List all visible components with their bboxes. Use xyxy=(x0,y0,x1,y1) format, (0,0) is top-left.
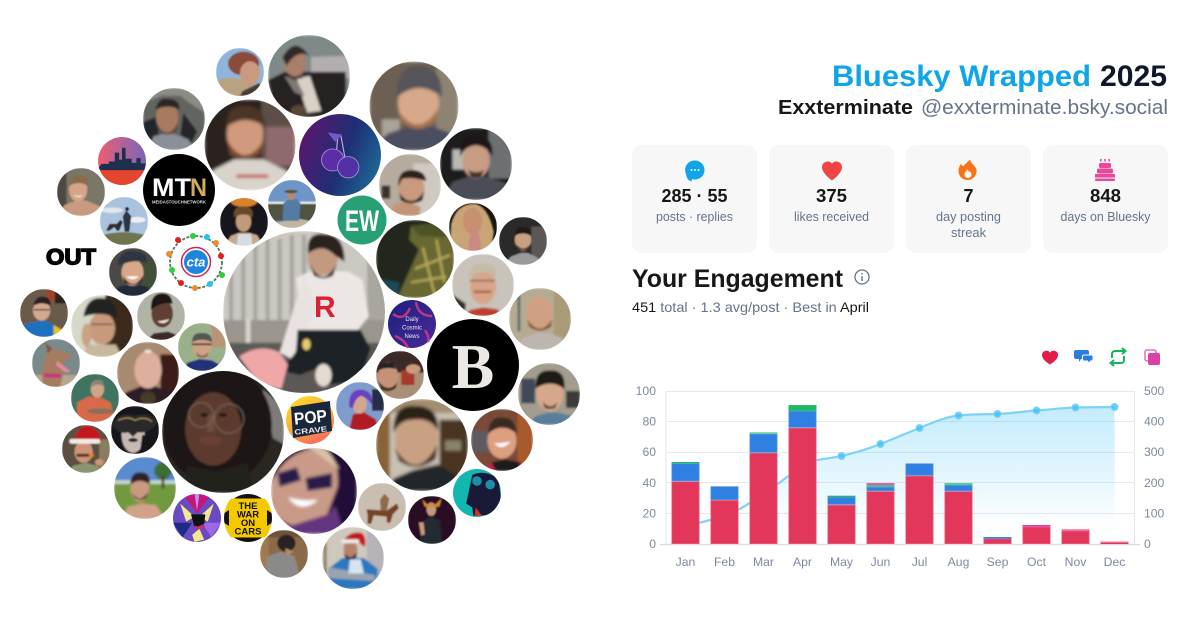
avatar: man with moustache and glasses xyxy=(452,254,514,316)
icon: legend heart xyxy=(1042,351,1058,364)
avatar cloud xyxy=(20,35,580,589)
avatar: man with glasses, purple toned xyxy=(271,448,357,534)
logo: MidasTouch Network xyxy=(143,154,215,226)
logo: The War on Cars: ON xyxy=(241,518,255,529)
avatar: man in landscape xyxy=(268,180,316,228)
avatar: glasses, blue jacket xyxy=(20,289,68,337)
month labels: Dec xyxy=(1104,555,1125,569)
logo: OUT: OUT xyxy=(46,244,97,270)
left axis labels: 100 xyxy=(636,384,656,398)
logo: Daily Cosmic News: News xyxy=(404,334,420,340)
stat card: day posting streak xyxy=(906,145,1031,253)
stat card: day posting streak: streak xyxy=(951,226,987,240)
month labels: May xyxy=(830,555,854,569)
logo: B: B xyxy=(452,331,494,402)
stat card: likes received: 375 xyxy=(816,186,847,206)
month labels: Sep xyxy=(987,555,1009,569)
icon: legend quotes xyxy=(1145,350,1160,365)
logo: The War on Cars: CARS xyxy=(235,526,261,538)
logo: Daily Cosmic News: Cosmic xyxy=(402,326,422,332)
avatar: vader with sunglasses xyxy=(453,469,501,517)
right axis labels: 0 xyxy=(1144,537,1151,551)
logo: Pop Crave xyxy=(286,396,334,444)
stat card: day posting streak: day posting xyxy=(936,210,1001,224)
avatar: man in black cap with hand on cheek xyxy=(71,295,133,357)
avatar: blonde praying xyxy=(449,203,497,251)
logo: MidasTouch Network: N xyxy=(190,174,207,202)
avatar: curly-haired man xyxy=(220,196,268,246)
avatar: man in selfie with red picture xyxy=(376,351,424,399)
avatar: man with beard in living room xyxy=(376,399,468,491)
logo: cta with string lights: cta xyxy=(187,254,205,270)
stat card: day posting streak: 7 xyxy=(963,186,974,206)
logo: Pop Crave: CRAVE xyxy=(294,424,328,437)
right axis labels: 500 xyxy=(1144,384,1165,398)
stat card: likes received: likes received xyxy=(794,210,869,224)
avatar: man with cat on couch xyxy=(268,35,350,117)
stat card: posts and replies: posts · replies xyxy=(656,210,733,224)
avatar: black and gold mask xyxy=(111,406,159,454)
right axis labels: 300 xyxy=(1144,445,1165,459)
avatar: man in rainbow tee xyxy=(499,217,547,265)
month labels: Feb xyxy=(714,555,735,569)
avatar: man in beanie xyxy=(370,62,458,150)
avatar: horse figurine xyxy=(358,483,406,531)
avatar: dog xyxy=(32,339,80,387)
month labels: Jun xyxy=(871,555,890,569)
avatar: tree and face xyxy=(216,48,264,96)
avatar: man in floral shirt xyxy=(71,374,119,422)
title: 2025 xyxy=(1100,60,1167,93)
logo: Daily Cosmic News xyxy=(388,300,436,348)
right axis labels: 400 xyxy=(1144,414,1165,428)
right axis labels: 200 xyxy=(1144,476,1165,490)
avatar: man in car xyxy=(143,88,205,150)
logo: EW xyxy=(338,196,386,244)
avatar: shirtless man on grass xyxy=(114,457,176,519)
user name and handle: Exxterminate xyxy=(778,97,913,119)
avatar: smiling man in cap xyxy=(109,248,157,296)
logo: EW: EW xyxy=(345,205,379,238)
avatar: man in santa hat xyxy=(62,425,110,473)
icon: chat bubble xyxy=(685,160,704,182)
month labels: Apr xyxy=(793,555,812,569)
icon: birthday cake xyxy=(1095,159,1115,181)
line: cumulative engagement xyxy=(686,407,1114,528)
avatar: person in grey jacket with dark mask xyxy=(260,530,308,578)
month labels: Jan xyxy=(676,555,695,569)
logo: MidasTouch Network: MEIDASTOUCHNETWORK xyxy=(152,200,206,206)
avatar: comedian with antlers xyxy=(408,496,456,544)
avatar: chicago skyline xyxy=(98,137,146,185)
logo: jester art xyxy=(173,494,221,542)
stat card: likes received xyxy=(769,145,894,253)
chart: monthly engagement xyxy=(636,384,1165,569)
month labels: Aug xyxy=(948,555,969,569)
avatar: glasses, navy shirt, colorful bg xyxy=(178,323,226,371)
avatar: smiling man with red collar xyxy=(471,409,533,471)
area: cumulative engagement xyxy=(686,407,1114,544)
logo: Pop Crave: POP xyxy=(293,406,328,429)
left axis labels: 80 xyxy=(642,414,656,428)
icon: legend replies xyxy=(1074,350,1093,364)
avatar: main man in team rocket sweater: R xyxy=(314,291,336,324)
avatar: woman with curly hair and glasses xyxy=(162,365,284,493)
avatar: aerial city lights xyxy=(376,220,454,298)
engagement summary: 451 total · 1.3 avg/post · Best in April xyxy=(632,299,869,315)
heading: Your Engagement: Your Engagement xyxy=(632,265,844,293)
avatar: main man in team rocket sweater xyxy=(223,231,387,395)
avatar: man in dark room xyxy=(440,128,512,200)
month labels xyxy=(676,555,1125,569)
left axis labels: 20 xyxy=(642,506,656,520)
icon: flame xyxy=(958,160,977,180)
logo: Daily Cosmic News: Daily xyxy=(405,317,419,323)
stat card: days on Bluesky xyxy=(1043,145,1168,253)
avatar: shirtless man smiling xyxy=(57,168,105,216)
avatar: smiling man with dark hair xyxy=(137,292,185,340)
avatar: man with goatee in blue shirt xyxy=(518,363,580,425)
month labels: Jul xyxy=(912,555,927,569)
logo: The War on Cars: THE xyxy=(238,501,258,512)
avatar: santa armor cosplay xyxy=(322,527,384,589)
icon: heart xyxy=(822,162,842,180)
avatar: bald man in dark shirt xyxy=(117,342,179,404)
user name and handle xyxy=(778,97,1168,119)
left axis labels: 0 xyxy=(649,537,656,551)
line points xyxy=(838,404,1118,460)
avatar: bald bearded man xyxy=(509,288,571,350)
icon: legend reposts xyxy=(1110,348,1126,366)
right axis labels: 100 xyxy=(1144,506,1165,520)
logo: B xyxy=(427,319,519,411)
left axis labels xyxy=(636,384,656,551)
bars: likes, replies, reposts, quotes xyxy=(672,405,1128,544)
logo: cta with string lights xyxy=(166,233,225,291)
avatar: bearded man in white tee xyxy=(204,100,296,190)
user name and handle: @exxterminate.bsky.social xyxy=(921,97,1168,119)
avatar: woman with purple hair xyxy=(336,382,384,430)
avatar: man with shaved beard and door xyxy=(379,154,441,216)
avatar: cherries xyxy=(299,114,381,196)
stat card: posts and replies: 285 · 55 xyxy=(662,186,728,206)
grid lines xyxy=(660,391,1140,544)
month labels: Mar xyxy=(753,555,774,569)
left axis labels: 40 xyxy=(642,476,656,490)
left axis labels: 60 xyxy=(642,445,656,459)
title: Bluesky Wrapped xyxy=(832,60,1091,93)
logo: The War on Cars: WAR xyxy=(237,510,259,520)
right axis labels xyxy=(1144,384,1165,551)
month labels: Nov xyxy=(1065,555,1087,569)
stat card: days on Bluesky: days on Bluesky xyxy=(1060,210,1151,224)
avatar: man with dog on hill xyxy=(100,197,148,245)
chart legend icons xyxy=(1042,348,1160,366)
icon: info xyxy=(855,270,869,284)
stat card: days on Bluesky: 848 xyxy=(1090,186,1121,206)
logo: MidasTouch Network: MT xyxy=(152,174,191,202)
logo: The War on Cars xyxy=(224,494,272,542)
stat card: posts and replies xyxy=(632,145,757,253)
month labels: Oct xyxy=(1027,555,1047,569)
